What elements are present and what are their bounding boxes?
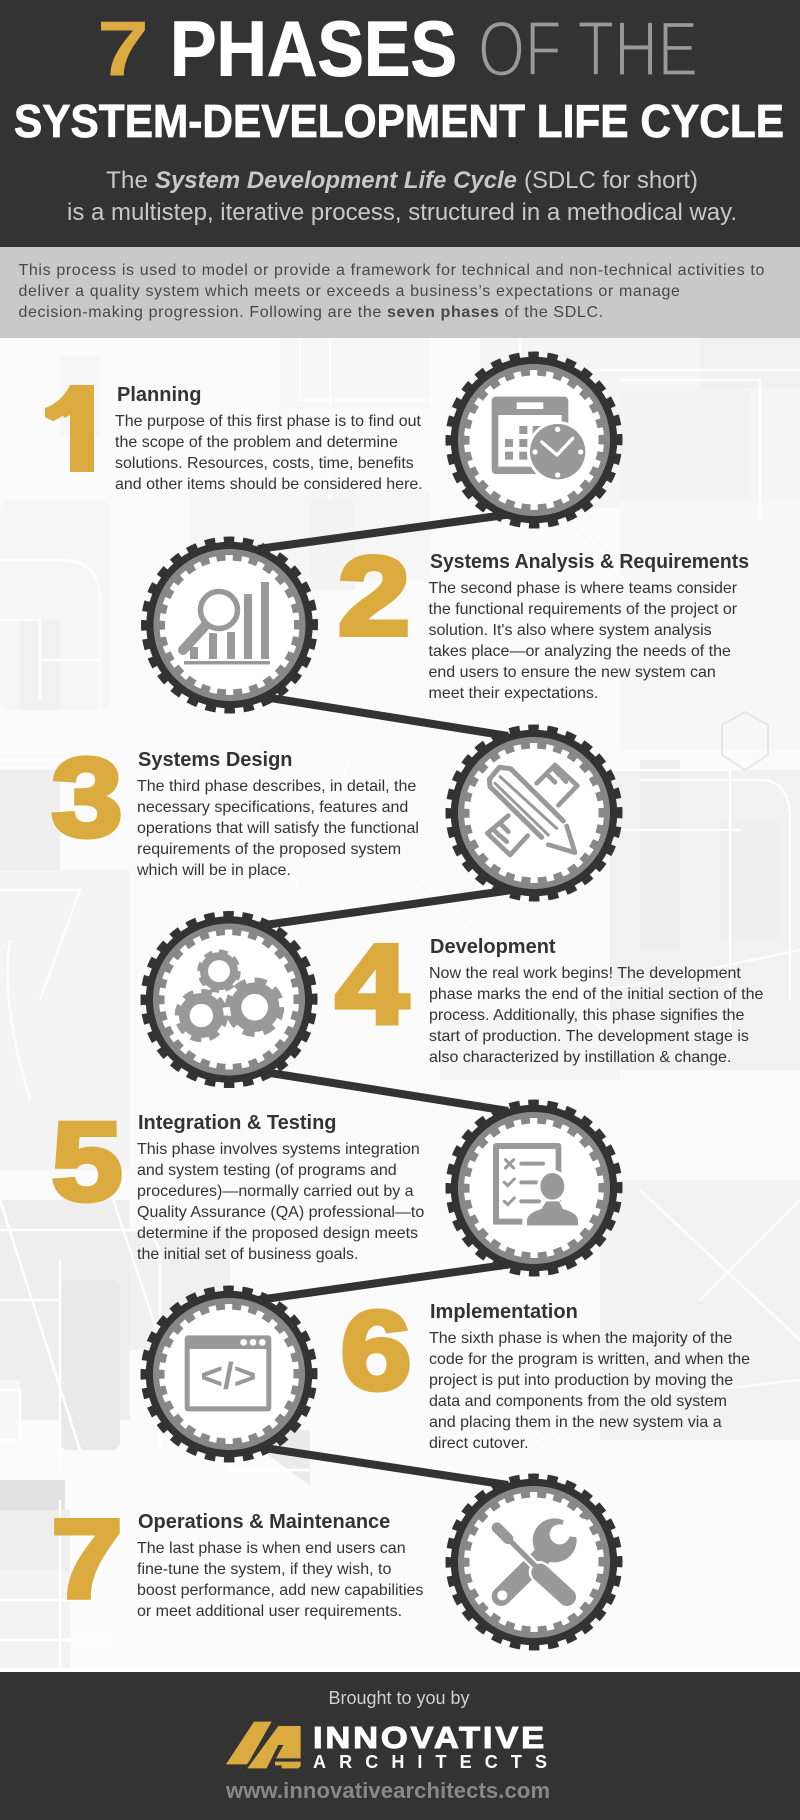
number 7: 7 — [51, 1496, 123, 1621]
body 2: takes place—or analyzing the needs of the — [428, 643, 731, 660]
gear 3 — [449, 728, 619, 898]
body 7: or meet additional user requirements. — [137, 1603, 402, 1620]
icon: magnifier and bars — [183, 582, 270, 664]
number 4: 4 — [336, 921, 408, 1047]
number 1: 1 — [40, 366, 114, 495]
body 1 — [115, 413, 423, 493]
body 6: direct cutover. — [429, 1435, 529, 1452]
heading 5: Integration & Testing — [138, 1112, 337, 1134]
body 5: and system testing (of programs and — [137, 1162, 397, 1179]
number 2: 2 — [338, 533, 410, 658]
icon: code window: </> — [200, 1354, 256, 1396]
body 4: phase marks the end of the initial section of the — [429, 986, 764, 1003]
heading 3: Systems Design — [138, 749, 293, 771]
body 3 — [136, 778, 419, 879]
footer panel: ARCHITECTS — [313, 1752, 547, 1772]
subtitle: System Development Life Cycle — [155, 167, 517, 194]
subtitle: The — [106, 167, 148, 194]
background: circuit pattern — [0, 338, 800, 1672]
footer panel — [0, 1672, 800, 1820]
body 3: The third phase describes, in detail, the — [137, 778, 416, 795]
body 6: The sixth phase is when the majority of the — [429, 1330, 732, 1347]
website: www.innovativearchitects.com — [225, 1778, 550, 1803]
phase 6 — [144, 1288, 750, 1459]
title line 1: PHASES — [170, 4, 457, 92]
body 4: also characterized by instillation & change. — [429, 1049, 731, 1066]
body 1: and other items should be considered here. — [115, 476, 423, 493]
body 2 — [428, 580, 738, 702]
gear 6 — [144, 1289, 314, 1459]
title line 1 — [97, 4, 698, 92]
body 7: boost performance, add new capabilities — [137, 1582, 423, 1599]
gear 2 — [144, 540, 314, 710]
number 3: 3 — [51, 735, 123, 860]
icon: cog wheels — [177, 952, 281, 1039]
phase 5 — [51, 1099, 619, 1273]
heading 1: Planning — [117, 384, 201, 406]
heading 6: Implementation — [430, 1301, 578, 1323]
subtitle — [67, 167, 737, 226]
body 7: The last phase is when end users can — [137, 1540, 406, 1557]
body 5: the initial set of business goals. — [137, 1246, 358, 1263]
heading 2: Systems Analysis & Requirements — [430, 551, 749, 573]
icon: pencil and ruler — [487, 765, 577, 855]
icon: wrench and screwdriver — [497, 1514, 587, 1600]
gear 7 — [449, 1477, 619, 1647]
title line 1: 7 — [97, 4, 149, 92]
body 6: data and components from the old system — [429, 1393, 727, 1410]
body 4 — [429, 965, 764, 1066]
number 6: 6 — [340, 1288, 412, 1413]
body 6 — [429, 1330, 750, 1452]
phase 4 — [144, 914, 764, 1084]
body 2: solution. It's also where system analysis — [428, 622, 712, 639]
body 1: The purpose of this first phase is to find out — [115, 413, 422, 430]
heading 4: Development — [430, 936, 556, 958]
body 7 — [137, 1540, 423, 1620]
subtitle: is a multistep, iterative process, structured in a methodical way. — [67, 199, 737, 226]
gear 4 — [144, 914, 314, 1084]
title line 1: OF THE — [478, 4, 698, 92]
header panel — [0, 0, 800, 247]
logo wordmark: INNOVATIVE — [313, 1720, 547, 1755]
body 2: meet their expectations. — [428, 685, 598, 702]
body 2: The second phase is where teams consider — [428, 580, 738, 597]
phase 7 — [51, 1477, 619, 1647]
body 5 — [137, 1141, 424, 1263]
intro band: decision-making progression. Following are the seven phases of the SDLC. — [18, 304, 604, 321]
body 3: requirements of the proposed system — [137, 841, 401, 858]
subtitle: (SDLC for short) — [524, 167, 698, 194]
gear 5 — [449, 1103, 619, 1273]
body 6: and placing them in the new system via a — [429, 1414, 722, 1431]
heading 7: Operations & Maintenance — [138, 1511, 390, 1533]
body 2: the functional requirements of the project or — [428, 601, 738, 618]
body 7: fine-tune the system, if they wish, to — [137, 1561, 391, 1578]
body 3: necessary specifications, features and — [137, 799, 408, 816]
body 6: code for the program is written, and when the — [429, 1351, 750, 1368]
icon: checklist and person — [493, 1143, 578, 1226]
intro band: deliver a quality system which meets or exceeds a business’s expectations or manage — [18, 283, 681, 300]
body 6: project is put into production by moving the — [429, 1372, 733, 1389]
phase 3 — [51, 728, 619, 898]
body 4: process. Additionally, this phase signifies the — [429, 1007, 745, 1024]
body 1: the scope of the problem and determine — [115, 434, 398, 451]
body 1: solutions. Resources, costs, time, benefits — [115, 455, 414, 472]
icon: calendar and clock — [492, 397, 588, 482]
body 2: end users to ensure the new system can — [428, 664, 716, 681]
connector lines — [258, 514, 512, 1485]
logo mark — [226, 1722, 301, 1768]
body 3: operations that will satisfy the functional — [137, 820, 419, 837]
body 3: which will be in place. — [136, 862, 291, 879]
intro band — [0, 247, 800, 338]
phase 2 — [144, 533, 749, 710]
phase 1 — [40, 355, 619, 525]
body 4: Now the real work begins! The development — [429, 965, 741, 982]
sponsor line: Brought to you by — [328, 1688, 470, 1708]
body 4: start of production. The development stage is — [429, 1028, 749, 1045]
body 5: procedures)—normally carried out by a — [137, 1183, 414, 1200]
intro band: This process is used to model or provide a framework for technical and non-technical activities to — [18, 262, 765, 279]
number 5: 5 — [51, 1099, 123, 1224]
icon: code window — [185, 1335, 271, 1411]
gear 1 — [449, 355, 619, 525]
body 5: This phase involves systems integration — [137, 1141, 420, 1158]
body 5: Quality Assurance (QA) professional—to — [137, 1204, 424, 1221]
body 5: determine if the proposed design meets — [137, 1225, 418, 1242]
